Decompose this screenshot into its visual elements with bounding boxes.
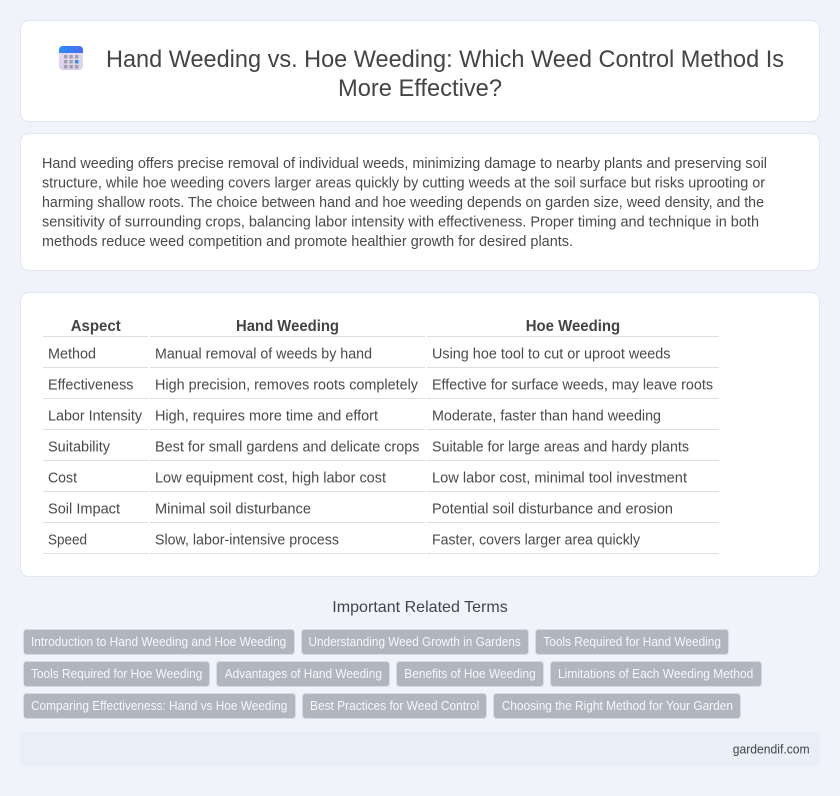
title bbox=[106, 46, 784, 102]
row: effectiveness: High precision, removes roots completely bbox=[155, 378, 419, 394]
row: cost: Low equipment cost, high labor cost bbox=[155, 470, 386, 486]
row: cost: Cost bbox=[48, 470, 77, 486]
row: labor intensity: High, requires more time and effort bbox=[155, 408, 378, 424]
row: effectiveness bbox=[48, 378, 713, 394]
row: method: Using hoe tool to cut or uproot weeds bbox=[432, 346, 670, 362]
tag: Introduction to Hand Weeding and Hoe Weeding bbox=[31, 635, 286, 649]
row: labor intensity: Labor Intensity bbox=[48, 408, 143, 424]
tag: Advantages of Hand Weeding bbox=[225, 667, 382, 681]
summary text: harming shallow roots. The choice between hand and hoe weeding depends on garden size, weed density, and the bbox=[42, 195, 764, 211]
tag bbox=[24, 694, 296, 718]
tag bbox=[302, 630, 528, 654]
row: suitability: Suitability bbox=[48, 440, 111, 456]
summary text: structure, while hoe weeding covers larger areas quickly by cutting weeds at the soil surface but risks uprooting or bbox=[42, 176, 765, 192]
title: More Effective? bbox=[338, 75, 502, 102]
tag: Understanding Weed Growth in Gardens bbox=[308, 635, 521, 649]
heading: related terms: Important Related Terms bbox=[332, 599, 508, 616]
tag: Tools Required for Hoe Weeding bbox=[31, 667, 202, 681]
row: cost: Low labor cost, minimal tool investment bbox=[432, 470, 687, 486]
row: method bbox=[48, 346, 670, 362]
row: method: Manual removal of weeds by hand bbox=[155, 346, 372, 362]
footer bar bbox=[20, 732, 820, 766]
row: soil impact: Minimal soil disturbance bbox=[155, 502, 311, 518]
row: suitability: Suitable for large areas and hardy plants bbox=[432, 440, 689, 456]
tag: Benefits of Hoe Weeding bbox=[404, 667, 536, 681]
row: labor intensity bbox=[48, 408, 661, 424]
title: Hand Weeding vs. Hoe Weeding: Which Weed Control Method Is bbox=[106, 46, 784, 73]
tag bbox=[536, 630, 728, 654]
row: speed bbox=[48, 532, 641, 548]
row: soil impact bbox=[48, 502, 673, 518]
row: labor intensity: Moderate, faster than hand weeding bbox=[432, 408, 661, 424]
summary text bbox=[42, 156, 767, 250]
tag: Comparing Effectiveness: Hand vs Hoe Weeding bbox=[31, 699, 287, 713]
row: effectiveness: Effectiveness bbox=[48, 378, 134, 394]
row: cost bbox=[48, 470, 687, 486]
tag bbox=[24, 630, 294, 654]
tag bbox=[494, 694, 740, 718]
row: soil impact: Potential soil disturbance and erosion bbox=[432, 502, 673, 518]
table header bbox=[71, 318, 620, 335]
tag: Best Practices for Weed Control bbox=[310, 699, 479, 713]
row: speed: Faster, covers larger area quickly bbox=[432, 532, 641, 548]
summary text: methods reduce weed competition and promote healthier growth for desired plants. bbox=[42, 234, 573, 250]
row: effectiveness: Effective for surface weeds, may leave roots bbox=[432, 378, 713, 394]
tag bbox=[302, 694, 486, 718]
table header: Hoe Weeding bbox=[526, 318, 620, 335]
footer site name: gardendif.com bbox=[733, 741, 810, 756]
panel: summary paragraph bbox=[20, 134, 820, 270]
panel: comparison table bbox=[20, 292, 820, 576]
tag: Choosing the Right Method for Your Garden bbox=[502, 699, 733, 713]
tag: Limitations of Each Weeding Method bbox=[558, 667, 753, 681]
row: suitability bbox=[48, 440, 689, 456]
tag bbox=[550, 662, 762, 686]
tag bbox=[24, 662, 210, 686]
row: soil impact: Soil Impact bbox=[48, 502, 120, 518]
row: speed: Slow, labor-intensive process bbox=[155, 532, 339, 548]
row: method: Method bbox=[48, 346, 96, 362]
table header: Aspect bbox=[71, 318, 121, 335]
tag bbox=[396, 662, 544, 686]
panel: title header bbox=[20, 20, 820, 122]
tag: Tools Required for Hand Weeding bbox=[543, 635, 721, 649]
summary text: Hand weeding offers precise removal of individual weeds, minimizing damage to nearby plants and preserving soil bbox=[42, 156, 767, 172]
row: speed: Speed bbox=[48, 532, 87, 548]
panel: related term tags bbox=[24, 630, 762, 718]
row: suitability: Best for small gardens and delicate crops bbox=[155, 440, 420, 456]
icon: calendar bbox=[59, 46, 83, 70]
table header: Hand Weeding bbox=[236, 318, 339, 335]
tag bbox=[216, 662, 390, 686]
summary text: sensitivity of surrounding crops, balancing labor intensity with effectiveness. Proper timing and technique in both bbox=[42, 214, 759, 230]
